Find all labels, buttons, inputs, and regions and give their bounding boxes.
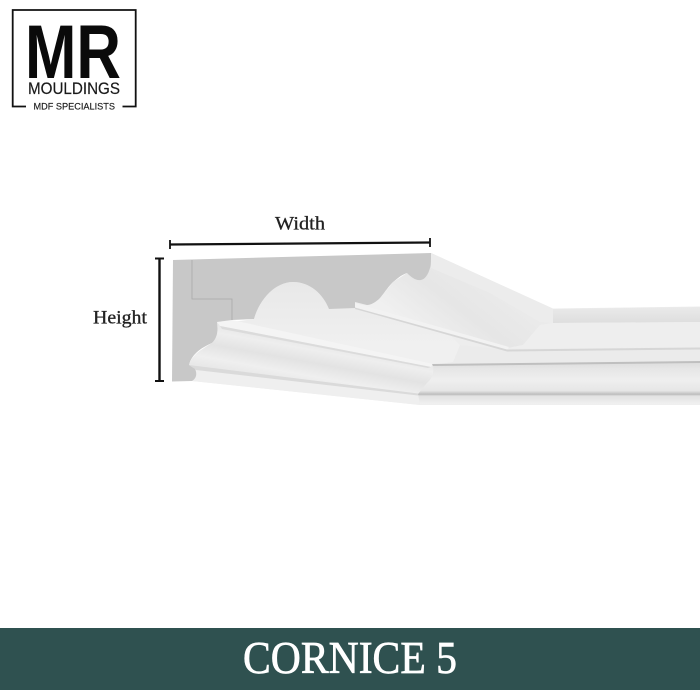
title text: CORNICE 5 [243,633,457,683]
upper return face [355,253,553,348]
main lower profile face [189,322,433,394]
logo tagline: MDF SPECIALISTS [34,101,115,111]
upper fillet shadow [355,308,700,352]
upper straight run recess [553,307,700,323]
middle straight run [432,345,700,365]
cut profile face [172,253,431,382]
lower foot band [192,369,420,405]
logo: MR Mouldings [13,10,136,111]
upper straight run face [508,322,700,348]
title banner [0,628,700,690]
upper fillet band [355,303,509,350]
logo monogram: MR [25,10,121,95]
cornice moulding render [172,253,700,405]
width dimension bracket [170,238,430,249]
logo wordmark: MOULDINGS [28,79,120,98]
lower foot crease [189,365,418,396]
profile joint line [192,260,232,320]
height dimension bracket [155,258,164,381]
width dimension label: Width [275,214,325,234]
dome and cove face [232,282,460,365]
logo frame [13,10,136,106]
upper return top facet [431,253,553,323]
straight run top edge [432,361,700,366]
height dimension label: Height [93,308,148,328]
moulding silhouette [192,253,700,405]
lower straight run [418,362,700,404]
lower top fillet [217,320,433,367]
lower top fillet shadow [220,326,431,368]
